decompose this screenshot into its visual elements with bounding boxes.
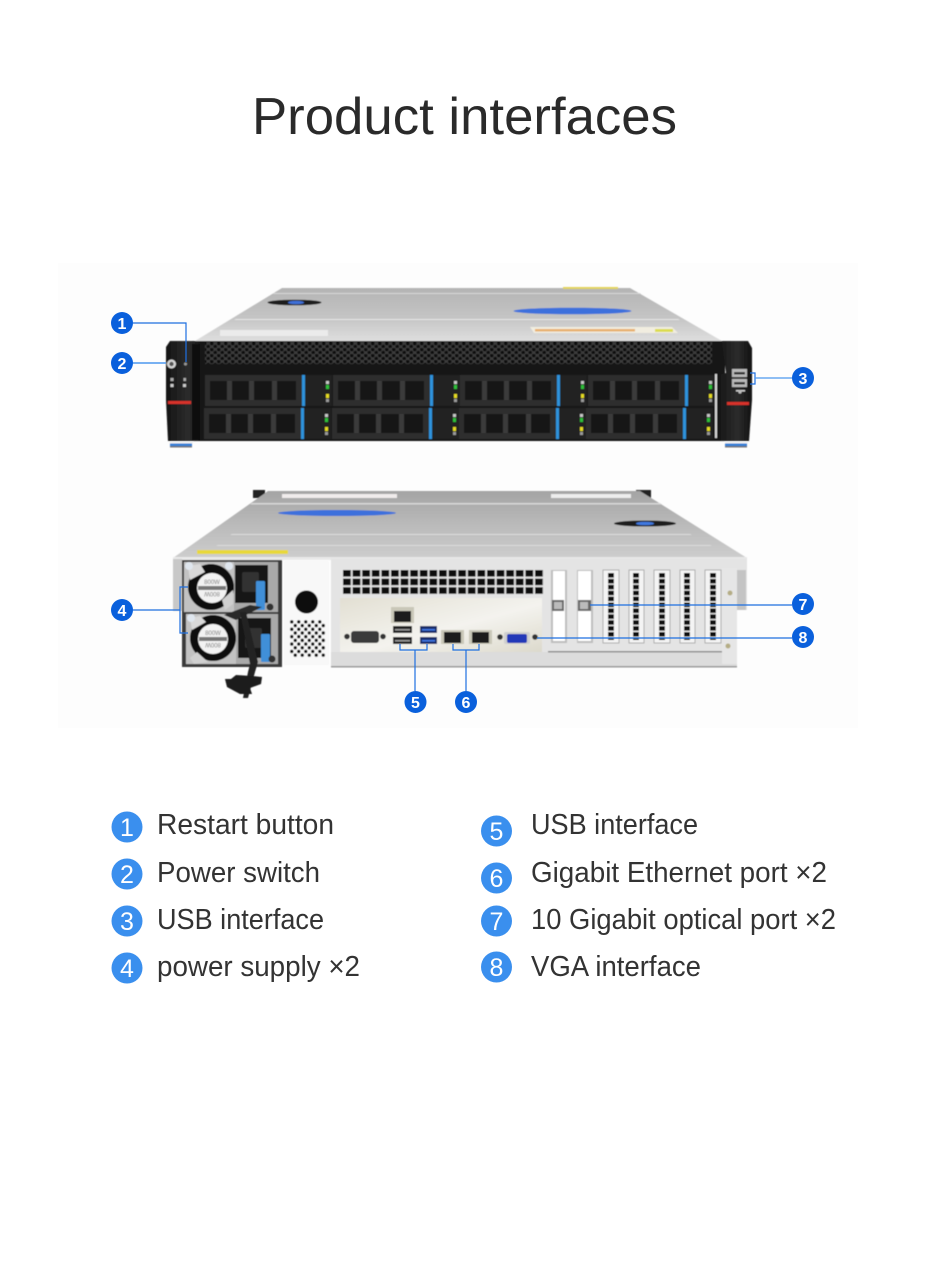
legend item 5: 5 <box>490 818 503 846</box>
management RJ45 port <box>391 607 414 623</box>
callout 6: gigabit ethernet <box>453 644 479 713</box>
legend item 4: 4 <box>120 955 134 983</box>
callout 4: power supplies <box>111 587 188 633</box>
drive bays <box>204 375 715 439</box>
callout 7: optical port <box>590 593 814 615</box>
front top cover <box>195 287 722 341</box>
lower power supply: 800W <box>205 641 221 647</box>
gigabit ethernet ports <box>441 630 492 644</box>
serial port <box>344 631 386 643</box>
legend item 7: 10 Gigabit optical port ×2 <box>531 904 836 936</box>
upper power supply <box>184 562 278 612</box>
rear top cover <box>173 490 747 558</box>
callout 7: optical port: 7 <box>799 597 808 614</box>
legend: left column <box>112 809 360 984</box>
callout 5: rear USB: 5 <box>411 695 420 712</box>
rear chassis face <box>173 557 747 560</box>
lower power supply: 800W <box>205 631 221 637</box>
callout 2: power switch <box>111 352 166 374</box>
legend item 8: VGA interface <box>531 951 701 983</box>
legend item 3: USB interface <box>157 904 324 936</box>
left rack ear <box>166 341 203 448</box>
legend item 7: 7 <box>490 908 503 936</box>
power supply modules <box>184 562 278 698</box>
front chassis <box>197 341 725 441</box>
title: Product interfaces <box>252 88 677 146</box>
right flange <box>722 568 746 664</box>
rear right section <box>331 558 747 667</box>
legend item 6: 6 <box>490 865 503 893</box>
legend: right column <box>481 809 836 983</box>
callout 3: front USB <box>750 367 814 389</box>
upper power supply: 800W <box>204 580 220 586</box>
legend item 4: power supply ×2 <box>157 951 360 983</box>
rear USB ports <box>393 626 437 644</box>
rear I/O plate <box>340 598 542 652</box>
callout 1: restart button: 1 <box>118 316 127 333</box>
upper power supply: 800W <box>204 590 220 596</box>
panel: product photo backdrop <box>58 263 858 728</box>
lower power supply <box>186 614 278 664</box>
callout 5: rear USB <box>400 644 427 713</box>
optical ports <box>552 600 591 611</box>
callout 4: power supplies: 4 <box>118 603 127 620</box>
legend item 5 <box>481 809 698 846</box>
legend item 5: USB interface <box>531 809 698 841</box>
legend item 1: 1 <box>120 814 134 842</box>
legend item 2: Power switch <box>157 857 320 889</box>
server rear view <box>173 490 747 698</box>
power cable tie <box>224 605 262 698</box>
callout 6: gigabit ethernet: 6 <box>462 695 471 712</box>
rear vent grid <box>343 570 544 594</box>
callout 8: VGA <box>537 626 814 648</box>
PCIe slots <box>548 570 728 652</box>
legend item 6: Gigabit Ethernet port ×2 <box>531 857 827 889</box>
server front view <box>166 287 752 448</box>
front honeycomb vent <box>205 342 712 364</box>
legend item 1: Restart button <box>157 809 334 841</box>
legend item 3: 3 <box>120 908 134 936</box>
VGA port <box>497 632 538 644</box>
right rack ear <box>715 341 752 448</box>
callout 3: front USB: 3 <box>799 371 808 388</box>
legend item 8: 8 <box>490 954 503 982</box>
callout 8: VGA: 8 <box>799 630 808 647</box>
callout 1: restart button <box>111 312 186 362</box>
legend item 2: 2 <box>120 861 134 889</box>
blank panel with fan hole <box>284 561 329 665</box>
callout 2: power switch: 2 <box>118 356 127 373</box>
